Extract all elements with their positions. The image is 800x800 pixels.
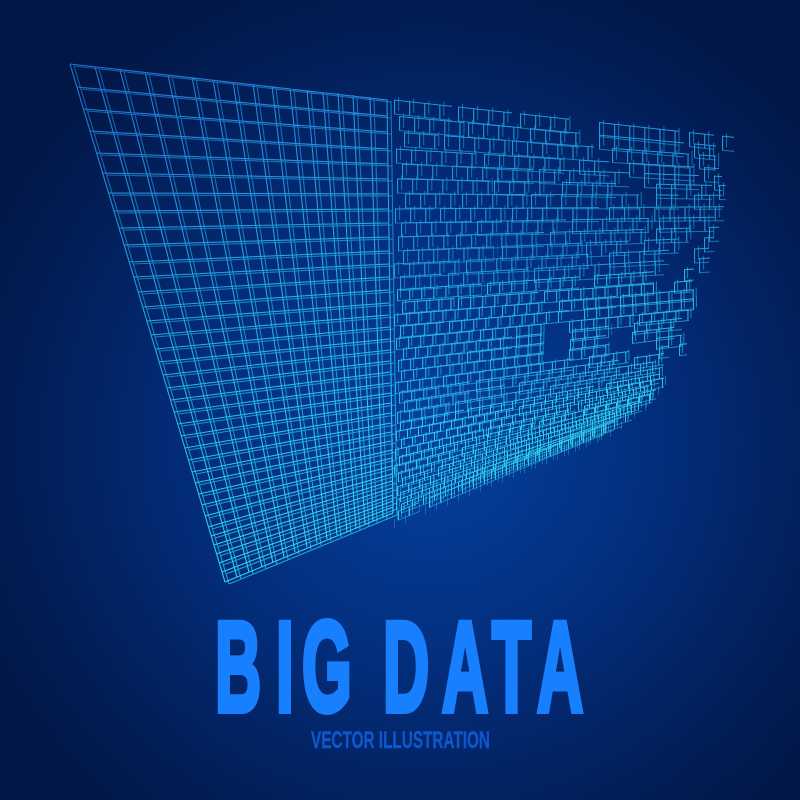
3D wireframe cube wall (70, 64, 738, 584)
upper scattered cubes (394, 100, 738, 291)
lower scattered cubes (390, 374, 667, 523)
solid grid section (70, 64, 397, 584)
subtitle: vector illustration: VECTOR ILLUSTRATION (311, 727, 490, 754)
title: BIG DATA: BIG DATA (215, 596, 583, 739)
middle scattered cubes (394, 269, 697, 423)
